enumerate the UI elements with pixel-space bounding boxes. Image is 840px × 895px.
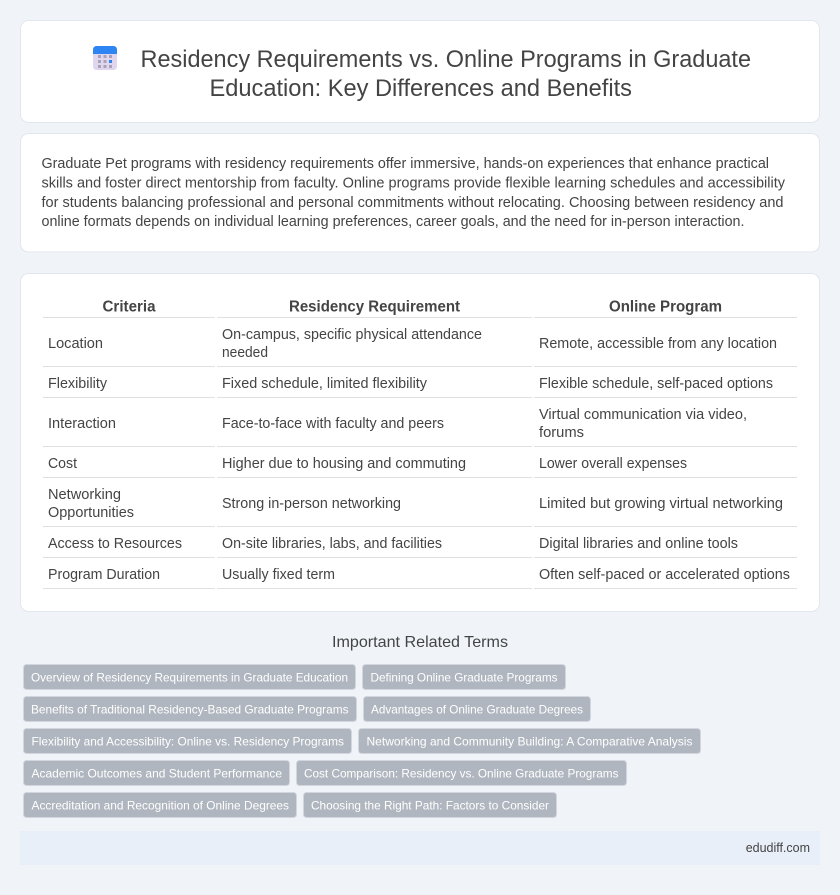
row: interaction: Virtual communication via video, [539, 407, 747, 423]
row: location [48, 327, 777, 361]
row: location: On-campus, specific physical attendance [222, 327, 482, 343]
tag [24, 664, 356, 690]
row: interaction: Interaction [48, 416, 116, 432]
row: program duration: Usually fixed term [222, 567, 335, 583]
text block: introduction [42, 156, 786, 230]
tag: Benefits of Traditional Residency-Based Graduate Programs [31, 702, 348, 716]
row: cost: Cost [48, 456, 77, 472]
tag: Cost Comparison: Residency vs. Online Graduate Programs [304, 766, 618, 780]
tag: Overview of Residency Requirements in Graduate Education [31, 670, 348, 684]
panel: comparison table [20, 274, 820, 612]
row: networking opportunities [48, 487, 783, 521]
row: flexibility: Fixed schedule, limited flexibility [222, 376, 428, 392]
tag [364, 696, 590, 722]
row: interaction [48, 407, 747, 441]
table header: Residency Requirement [289, 298, 461, 316]
row: location: Remote, accessible from any location [539, 336, 777, 352]
tag: Defining Online Graduate Programs [370, 670, 558, 684]
table header [102, 298, 722, 316]
tag: Networking and Community Building: A Comparative Analysis [366, 734, 692, 748]
tag [362, 664, 566, 690]
row: program duration: Program Duration [48, 567, 160, 583]
row: program duration: Often self-paced or accelerated options [539, 567, 790, 583]
footer [20, 831, 820, 865]
tag: Academic Outcomes and Student Performance [32, 766, 282, 780]
table header: Online Program [609, 298, 722, 316]
tag: Accreditation and Recognition of Online Degrees [32, 798, 289, 812]
row: interaction: forums [539, 425, 584, 441]
footer: site name: edudiff.com [746, 841, 810, 855]
row: access to resources: Digital libraries and online tools [539, 536, 738, 552]
row: location: needed [222, 345, 268, 361]
tag: Advantages of Online Graduate Degrees [371, 702, 583, 716]
tag: Choosing the Right Path: Factors to Consider [311, 798, 549, 812]
row: access to resources: On-site libraries, labs, and facilities [222, 536, 442, 552]
row: program duration [48, 567, 790, 583]
tag [304, 792, 556, 818]
panel: introduction [20, 134, 820, 252]
tag [24, 728, 352, 754]
row: access to resources [48, 536, 738, 552]
row: networking opportunities: Networking [48, 487, 121, 503]
panel: header [20, 20, 820, 122]
text block: introduction: skills and foster direct mentorship from faculty. Online programs provide flexible learning schedules and accessibility [42, 176, 786, 192]
icon: calendar [93, 46, 117, 70]
panel: related term tags [24, 664, 700, 818]
tag: Flexibility and Accessibility: Online vs. Residency Programs [32, 734, 344, 748]
row: networking opportunities: Limited but growing virtual networking [539, 496, 783, 512]
row: flexibility: Flexibility [48, 376, 108, 392]
text block: introduction: Graduate Pet programs with residency requirements offer immersive, hands-on experiences that enhance practical [42, 156, 769, 172]
row: cost: Higher due to housing and commuting [222, 456, 466, 472]
tag [24, 760, 290, 786]
tag [296, 760, 626, 786]
title: Education: Key Differences and Benefits [210, 75, 632, 102]
tag [24, 792, 296, 818]
table header: Criteria [102, 298, 156, 316]
tag [358, 728, 700, 754]
text block: introduction: for students balancing professional and personal commitments without relocating. Choosing between residency and [42, 195, 784, 211]
row: access to resources: Access to Resources [48, 536, 182, 552]
row: interaction: Face-to-face with faculty and peers [222, 416, 444, 432]
title [140, 46, 751, 102]
row: networking opportunities: Opportunities [48, 505, 134, 521]
row: flexibility [48, 376, 773, 392]
row: networking opportunities: Strong in-person networking [222, 496, 401, 512]
row: cost: Lower overall expenses [539, 456, 687, 472]
row: flexibility: Flexible schedule, self-paced options [539, 376, 773, 392]
text block: introduction: online formats depends on individual learning preferences, career goals, and the need for in-person interaction. [42, 214, 744, 230]
row: location: Location [48, 336, 103, 352]
title: Residency Requirements vs. Online Programs in Graduate [140, 46, 751, 73]
heading: important related terms: Important Related Terms [332, 634, 508, 651]
tag [24, 696, 356, 722]
row: cost [48, 456, 687, 472]
